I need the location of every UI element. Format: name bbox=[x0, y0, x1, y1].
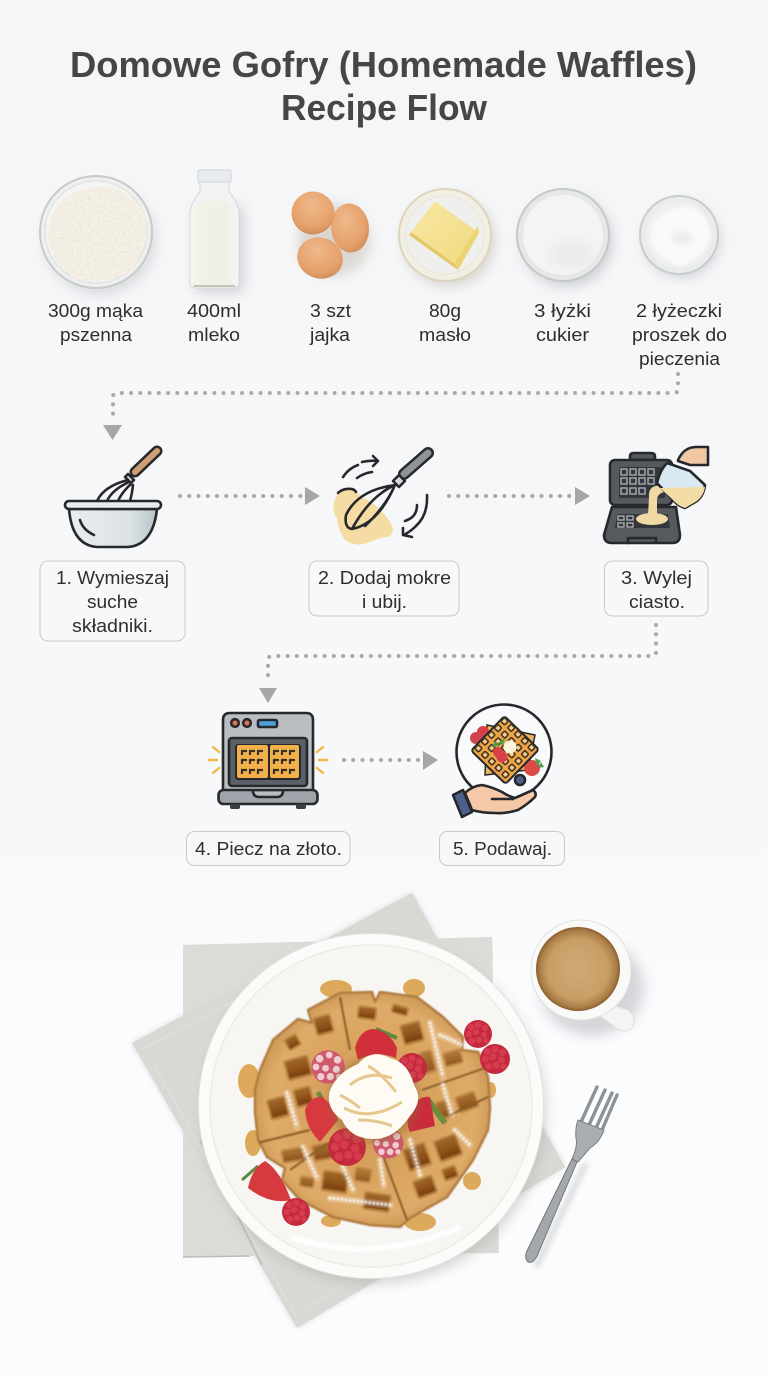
label: sugar bbox=[534, 301, 591, 345]
ingredient: milk bottle bbox=[190, 170, 244, 293]
label: flour: 300g mąka bbox=[48, 301, 144, 321]
label: baking powder: pieczenia bbox=[639, 349, 721, 369]
label: sugar: 3 łyżki bbox=[534, 301, 591, 321]
arrow: step 4 to step 5 bbox=[344, 751, 438, 770]
label: butter: masło bbox=[419, 325, 471, 345]
title bbox=[70, 44, 697, 128]
ingredient: flour bowl bbox=[40, 176, 156, 295]
label box: step 1: 1. Wymieszaj bbox=[56, 568, 169, 588]
label box: step 4 bbox=[186, 832, 350, 866]
label box: step 5 bbox=[440, 832, 564, 866]
label box: step 1: suche bbox=[87, 592, 138, 612]
photo: waffles on plate with coffee and fork bbox=[132, 893, 644, 1328]
label: baking powder bbox=[632, 301, 727, 369]
label: milk: mleko bbox=[188, 325, 240, 345]
fork bbox=[526, 1087, 617, 1267]
label box: step 3: ciasto. bbox=[629, 592, 685, 612]
label box: step 5: 5. Podawaj. bbox=[453, 839, 552, 859]
label: sugar: cukier bbox=[536, 325, 589, 345]
label: flour: pszenna bbox=[60, 325, 133, 345]
title: Domowe Gofry (Homemade Waffles) bbox=[70, 44, 697, 85]
label: flour bbox=[48, 301, 144, 345]
arrow: step 2 to step 3 bbox=[449, 487, 590, 505]
waffle bbox=[255, 992, 490, 1227]
napkin bbox=[132, 893, 565, 1328]
label box: step 4: 4. Piecz na złoto. bbox=[195, 839, 342, 859]
icon: served waffle on plate held by hand bbox=[453, 704, 552, 817]
ingredient: baking powder bowl bbox=[640, 196, 720, 278]
label: milk: 400ml bbox=[187, 301, 241, 321]
ingredient: sugar bowl bbox=[517, 189, 613, 287]
label: butter: 80g bbox=[429, 301, 461, 321]
label box: step 2 bbox=[309, 561, 459, 616]
label: eggs bbox=[309, 301, 351, 345]
label box: step 3 bbox=[604, 561, 708, 616]
label: eggs: 3 szt bbox=[310, 301, 351, 321]
berries bbox=[242, 1020, 510, 1226]
arrow: ingredients to step 1 bbox=[103, 374, 678, 440]
arrow: step 3 to step 4 bbox=[259, 625, 656, 703]
label box: step 2: i ubij. bbox=[362, 592, 407, 612]
ingredient: butter dish bbox=[399, 189, 495, 287]
label box: step 1: składniki. bbox=[72, 616, 153, 636]
plate bbox=[198, 934, 546, 1284]
icon: whisking batter bbox=[333, 453, 428, 545]
whipped cream bbox=[328, 1054, 420, 1143]
arrow: step 1 to step 2 bbox=[180, 487, 320, 505]
label: baking powder: 2 łyżeczki bbox=[636, 301, 722, 321]
label box: step 2: 2. Dodaj mokre bbox=[318, 568, 451, 588]
coffee cup bbox=[531, 920, 644, 1036]
label: eggs: jajka bbox=[309, 325, 351, 345]
icon: bowl and whisk bbox=[65, 451, 161, 547]
icon: waffle maker baking bbox=[209, 713, 327, 809]
syrup pools bbox=[238, 979, 496, 1231]
label: butter bbox=[419, 301, 471, 345]
ingredient: eggs bbox=[284, 184, 371, 285]
icon: pouring batter into waffle iron bbox=[604, 447, 708, 543]
label box: step 3: 3. Wylej bbox=[621, 568, 692, 588]
label box: step 1 bbox=[40, 561, 185, 641]
label: milk bbox=[187, 301, 241, 345]
title: Recipe Flow bbox=[281, 87, 488, 128]
label: baking powder: proszek do bbox=[632, 325, 727, 345]
